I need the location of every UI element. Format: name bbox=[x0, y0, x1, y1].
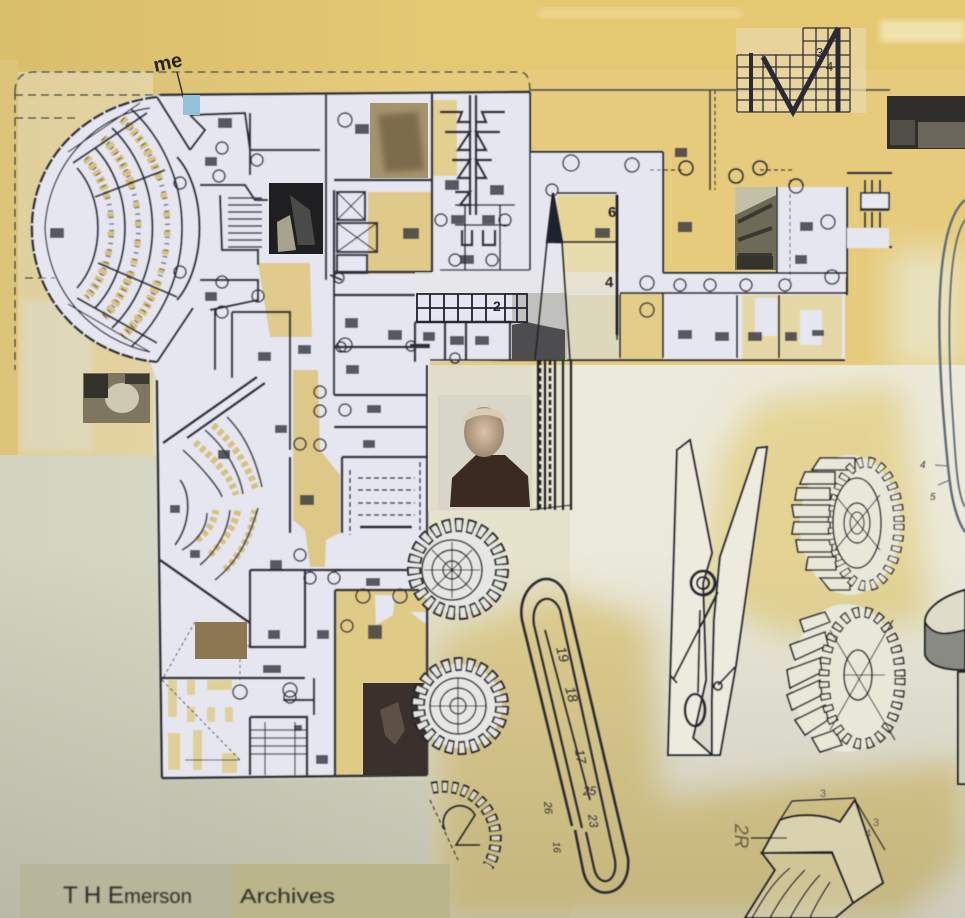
grid sketch with V mark: 4 bbox=[826, 59, 833, 74]
paper clip: 19 bbox=[553, 645, 573, 664]
plan sheet: white paper bbox=[32, 92, 847, 778]
caption strip: T H E bbox=[63, 882, 124, 909]
gear 3 bbox=[430, 787, 496, 866]
central rooms walls bbox=[157, 90, 892, 778]
gear 2 bbox=[418, 664, 502, 748]
horizontal plan line bbox=[530, 89, 890, 91]
tall triangle and column: 6 bbox=[608, 204, 616, 221]
paper clip: 25 bbox=[582, 784, 597, 798]
lift shafts bbox=[337, 192, 377, 273]
grid sketch with V mark bbox=[736, 28, 866, 113]
photo: sepia plaque bbox=[195, 622, 247, 659]
annotation: me bbox=[151, 49, 200, 115]
floor plan bbox=[15, 72, 892, 778]
lower auditorium bbox=[160, 377, 265, 623]
annotation: me: me bbox=[151, 49, 184, 77]
paper clip: 16 bbox=[550, 841, 562, 854]
hex bolt: 3 bbox=[873, 817, 879, 829]
caption strip: merson bbox=[124, 886, 192, 908]
grid sketch with V mark: 3 bbox=[816, 45, 823, 60]
portrait of man bbox=[428, 365, 532, 511]
clothes peg bbox=[668, 440, 767, 755]
right edge large clip outline bbox=[920, 200, 965, 532]
translucent strip over plan bbox=[415, 272, 620, 295]
grid strip with number 2: 2 bbox=[493, 298, 501, 314]
gear lower right bbox=[787, 604, 900, 752]
paper clip: 26 bbox=[541, 800, 554, 815]
tall triangle and column: 4 bbox=[605, 274, 614, 291]
gear top right bbox=[792, 455, 900, 595]
photo: faded portrait bbox=[512, 293, 567, 360]
photo: building bbox=[735, 187, 776, 270]
gears right bbox=[787, 455, 900, 752]
hex bolt: 2R bbox=[730, 823, 751, 849]
right edge cylinder bbox=[925, 590, 965, 784]
gears stacked under portrait bbox=[414, 525, 502, 866]
photo: dark couple bbox=[363, 683, 427, 775]
hex bolt bbox=[730, 788, 885, 918]
tall triangle and column bbox=[530, 193, 617, 510]
right edge large clip outline: 4 bbox=[920, 460, 926, 471]
photo: group sepia bbox=[370, 103, 428, 178]
right edge large clip outline: 5 bbox=[930, 492, 936, 503]
lobby and stair walls bbox=[177, 95, 342, 450]
large auditorium bbox=[32, 97, 193, 362]
hex bolt: 3 bbox=[820, 788, 826, 800]
small rooms lower left bbox=[162, 620, 314, 775]
door swings bbox=[174, 90, 839, 703]
hex bolt: 4 bbox=[865, 828, 871, 840]
classroom furniture bbox=[350, 462, 420, 535]
toilets stalls bbox=[440, 95, 530, 270]
caption strip bbox=[20, 864, 450, 918]
yellow rooms and stains bbox=[168, 100, 842, 775]
caption strip: Archives bbox=[240, 886, 335, 908]
room label blocks bbox=[50, 118, 824, 764]
gear 1 bbox=[414, 525, 502, 613]
photo: figure at left bbox=[83, 373, 150, 423]
paper clip: 17 bbox=[572, 748, 589, 766]
photo: edge strip bbox=[887, 96, 965, 149]
paper clip: 23 bbox=[585, 812, 601, 829]
plan dashed outline bbox=[15, 72, 530, 370]
photo: dark stage bbox=[269, 183, 323, 254]
stair block upper right bbox=[847, 180, 889, 248]
grid strip with number 2 bbox=[417, 294, 527, 322]
paper clip: 18 bbox=[562, 685, 582, 704]
paper clip bbox=[521, 579, 628, 893]
